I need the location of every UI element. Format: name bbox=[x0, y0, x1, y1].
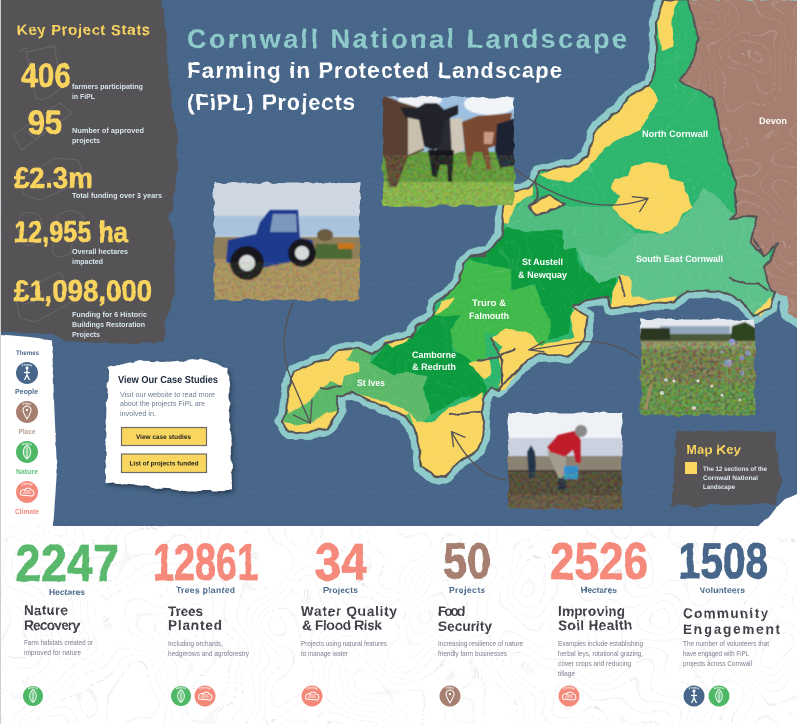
region labels bbox=[357, 115, 787, 388]
icon: nature bbox=[708, 686, 730, 706]
stat: historic buildings bbox=[14, 275, 152, 339]
stat column: soil health: Examples include establishing bbox=[558, 639, 643, 648]
stat: 406: in FiPL bbox=[72, 92, 95, 101]
yellow section: Fal bbox=[492, 307, 588, 390]
icon: climate bbox=[302, 686, 322, 706]
icon: climate: Climate bbox=[199, 686, 210, 690]
stat column: water quality: Water Quality bbox=[301, 604, 397, 619]
stat column: nature recovery: Farm habitats created or bbox=[24, 638, 94, 647]
label: Truro: Truro & bbox=[472, 297, 506, 308]
yellow section: Mount's Bay bbox=[354, 393, 409, 415]
yellow section: Bodmin Moor bbox=[611, 162, 693, 233]
green regions bbox=[277, 187, 774, 433]
case studies text bbox=[120, 390, 215, 418]
label: St Austell: St Austell bbox=[522, 256, 563, 267]
stat: hectares: impacted bbox=[72, 257, 103, 266]
icon: climate bbox=[194, 686, 216, 706]
stat: funding bbox=[14, 162, 162, 200]
map key heading: Map Key bbox=[686, 442, 742, 457]
yellow section: Fowey coast bbox=[611, 273, 677, 308]
icon: climate bbox=[558, 686, 580, 706]
arrow: person to Lizard bbox=[451, 432, 505, 480]
contour lines bbox=[0, 526, 797, 724]
stat column: trees planted: Including orchards, bbox=[168, 639, 223, 648]
stat column: nature recovery bbox=[15, 535, 119, 706]
label: Newquay: & Newquay bbox=[518, 269, 568, 280]
theme: climate: Climate bbox=[15, 507, 39, 516]
icon: place: Place bbox=[446, 686, 454, 690]
stat column: nature recovery: Recovery bbox=[24, 618, 80, 633]
stat column: water quality: 34 bbox=[315, 534, 367, 592]
yellow section: Rame bbox=[754, 297, 772, 317]
photo: planting person bbox=[507, 412, 623, 510]
label: Camborne: Camborne bbox=[412, 349, 456, 360]
label: South East Cornwall: South East Cornwall bbox=[636, 253, 723, 264]
icon: nature: Nature bbox=[28, 686, 38, 690]
map key text: Cornwall National bbox=[703, 475, 758, 482]
icon: people: People bbox=[688, 686, 700, 690]
label: North Cornwall: North Cornwall bbox=[642, 128, 708, 139]
panel: bottom statistics bbox=[1, 494, 797, 724]
stat: historic buildings: Buildings Restoration bbox=[72, 320, 145, 329]
subtitle: Farming in Protected Landscape bbox=[187, 58, 562, 83]
theme: nature: Nature bbox=[16, 467, 38, 476]
stat: funding: Total funding over 3 years bbox=[72, 191, 162, 200]
contour lines on land bbox=[286, 2, 776, 475]
stat column: trees planted: hedgerows and agroforestry bbox=[168, 649, 249, 658]
theme: people: People bbox=[22, 364, 32, 367]
stat column: nature recovery: 2247 bbox=[15, 535, 119, 593]
theme: nature: Nature bbox=[22, 442, 32, 446]
stat: 95: 95 bbox=[28, 104, 62, 142]
stat: historic buildings: Funding for 6 Historic bbox=[72, 310, 147, 319]
panel: view our case studies bbox=[105, 359, 232, 491]
yellow sections bbox=[280, 0, 772, 477]
stat column: food security: friendly farm businesses bbox=[438, 649, 507, 658]
stat column: soil health: 2526 bbox=[550, 533, 648, 591]
panel: key project stats bbox=[0, 0, 177, 344]
stat column: trees planted: 12861 bbox=[153, 534, 258, 592]
stat column: trees planted: Trees bbox=[168, 604, 203, 619]
arrow: field to Fal bbox=[529, 342, 638, 358]
panel: map key bbox=[672, 431, 781, 506]
stat column: trees planted: Trees planted bbox=[176, 585, 235, 595]
stat column: community engagement: 1508 bbox=[678, 533, 768, 589]
stat: 95: projects bbox=[72, 136, 100, 145]
stat column: soil health: tillage bbox=[558, 669, 575, 678]
stat column: community engagement: The number of volunteers that bbox=[683, 639, 769, 648]
stat column: nature recovery: Nature bbox=[24, 603, 68, 618]
stat column: soil health: herbal leys, rotational grazing, bbox=[558, 649, 643, 658]
stat: hectares: Overall hectares bbox=[72, 247, 128, 256]
Devon bbox=[679, 0, 797, 322]
icon: place bbox=[440, 686, 460, 706]
stat column: community engagement: Engagement bbox=[683, 622, 780, 637]
stat column: water quality bbox=[301, 534, 397, 706]
label: Redruth: & Redruth bbox=[412, 361, 456, 372]
label: Falmouth: Falmouth bbox=[469, 310, 509, 321]
arrow: tractor to Penwith bbox=[284, 303, 312, 423]
photo: tractor bbox=[212, 182, 361, 302]
theme: nature bbox=[16, 441, 38, 476]
estuaries bbox=[320, 182, 767, 415]
stat column: nature recovery: improved for nature bbox=[24, 648, 81, 657]
stat column: community engagement: Volunteers bbox=[700, 585, 745, 595]
stat column: soil health: cover crops and reducing bbox=[558, 659, 631, 668]
stat column: soil health: Improving bbox=[558, 604, 625, 619]
stat column: trees planted bbox=[153, 534, 258, 706]
subtitle bbox=[187, 58, 562, 115]
subtitle: (FiPL) Projects bbox=[187, 90, 355, 115]
stat: 406: 406 bbox=[21, 57, 71, 95]
theme: place bbox=[16, 401, 38, 436]
stat column: trees planted: Planted bbox=[168, 618, 222, 633]
theme: people bbox=[15, 362, 38, 396]
icon: people bbox=[684, 686, 704, 706]
icon: nature: Nature bbox=[176, 686, 186, 690]
stat: 95: Number of approved bbox=[72, 126, 144, 135]
map of Cornwall bbox=[270, 0, 797, 524]
contour lines on Devon bbox=[680, 0, 797, 312]
stat column: community engagement: have engaged with FiPL bbox=[683, 649, 749, 658]
title bbox=[187, 24, 627, 115]
land base: North Cornwall bbox=[282, 0, 778, 477]
coast outline bbox=[282, 0, 778, 477]
arrow: cows to Bodmin bbox=[514, 168, 648, 212]
stat column: community engagement: Community bbox=[683, 606, 768, 621]
theme: place: Place bbox=[18, 427, 36, 436]
yellow section: Camel estuary bbox=[529, 195, 566, 216]
stat column: food security: Projects bbox=[449, 585, 485, 595]
stat: funding: £2.3m bbox=[14, 162, 93, 195]
panel: themes column bbox=[1, 334, 58, 526]
photo: wildflower field bbox=[639, 318, 756, 417]
left edge line bbox=[0, 0, 1, 724]
stat: hectares bbox=[14, 216, 128, 266]
white torn strip bbox=[0, 493, 797, 724]
label: Devon: Devon bbox=[759, 115, 787, 126]
yellow section: St Agnes bbox=[435, 297, 455, 317]
icon: nature bbox=[23, 686, 43, 706]
stat column: food security: 50 bbox=[443, 533, 491, 589]
button: list of projects funded: List of projects funded bbox=[130, 460, 198, 468]
case studies text: about the projects FiPL are bbox=[120, 399, 205, 408]
stat: historic buildings: £1,098,000 bbox=[14, 275, 152, 308]
stat column: soil health: Soil Health bbox=[558, 618, 632, 633]
yellow section: Camel north bbox=[503, 183, 534, 223]
stat column: nature recovery: Hectares bbox=[49, 587, 85, 597]
coast halo bbox=[282, 0, 797, 477]
case studies text: involved in. bbox=[120, 409, 156, 418]
stat column: community engagement bbox=[678, 533, 780, 706]
label: St Ives: St Ives bbox=[357, 377, 385, 388]
yellow section: Lizard bbox=[409, 393, 483, 477]
stat: historic buildings: Projects bbox=[72, 330, 100, 339]
map key swatch bbox=[685, 462, 697, 474]
case studies text: Visit our website to read more bbox=[120, 390, 215, 399]
stat: 406: farmers participating bbox=[72, 82, 143, 91]
theme: climate: Climate bbox=[21, 482, 32, 486]
yellow section: Godrevy bbox=[384, 337, 411, 347]
stat column: food security: Increasing resilience of nature bbox=[438, 639, 523, 648]
map key text: Landscape bbox=[703, 484, 735, 491]
stat: 95 bbox=[28, 104, 144, 145]
yellow section: north coast bbox=[539, 85, 659, 182]
yellow section: Penwith south bbox=[280, 412, 339, 433]
stat column: water quality: Projects bbox=[323, 585, 358, 595]
stat column: food security: Food bbox=[438, 604, 465, 619]
stats heading: Key Project Stats bbox=[17, 22, 150, 39]
icon: nature bbox=[171, 686, 191, 706]
stat column: food security: Security bbox=[438, 619, 492, 634]
yellow section: far north bbox=[657, 0, 678, 50]
theme: place: Place bbox=[22, 402, 32, 406]
stat column: soil health: Hectares bbox=[581, 585, 617, 595]
icon: climate: Climate bbox=[563, 686, 574, 690]
stat column: community engagement: projects across Cornwall bbox=[683, 659, 752, 668]
stat column: water quality: to manage water bbox=[301, 649, 349, 658]
map key text bbox=[703, 466, 767, 491]
themes heading: Themes bbox=[16, 350, 39, 357]
icon: nature: Nature bbox=[714, 686, 724, 690]
case studies heading: View Our Case Studies bbox=[118, 375, 218, 386]
stat column: soil health bbox=[550, 533, 648, 706]
photo: cows bbox=[378, 92, 518, 210]
stat column: water quality: & Flood Risk bbox=[302, 618, 382, 633]
icon: climate: Climate bbox=[306, 686, 318, 690]
map key text: The 12 sections of the bbox=[703, 466, 767, 473]
stat column: food security bbox=[438, 533, 523, 706]
yellow section: West Penwith bbox=[287, 348, 359, 413]
sketch icons bbox=[13, 46, 85, 322]
stat column: water quality: Projects using natural features bbox=[301, 639, 387, 648]
theme: people: People bbox=[15, 387, 38, 396]
arrows bbox=[284, 168, 648, 480]
stat: hectares: 12,955 ha bbox=[14, 216, 128, 249]
yellow section: Helford bbox=[468, 357, 492, 380]
theme: climate bbox=[15, 481, 39, 516]
title line: Cornwall National Landscape: Cornwall National Landscape bbox=[187, 24, 627, 54]
stat: 406 bbox=[21, 57, 143, 101]
button: view case studies: View case studies bbox=[136, 434, 191, 441]
